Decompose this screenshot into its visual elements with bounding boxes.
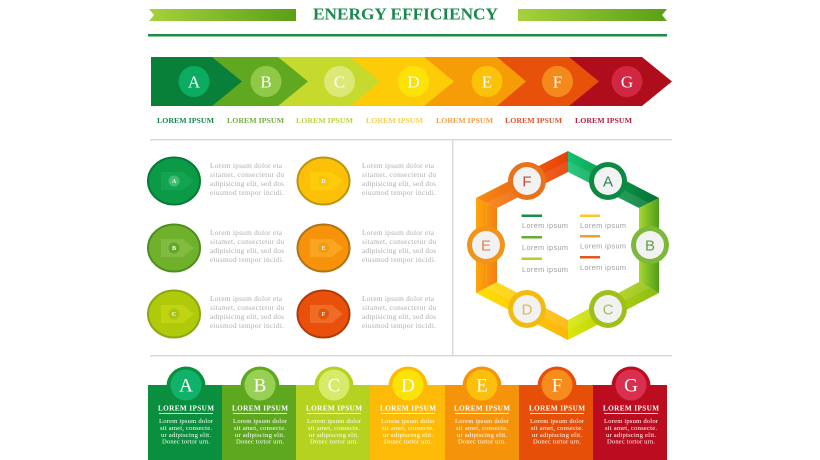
text A: sitamet, consectetur du xyxy=(210,170,284,179)
node A: A xyxy=(603,174,613,190)
ribbon: right xyxy=(518,9,667,21)
text E: sitamet, consectetur du xyxy=(362,237,436,246)
badge G: G xyxy=(621,72,633,92)
card G: sit amet, consecte. xyxy=(605,425,657,432)
text F: eiusmod tempor incidi. xyxy=(362,321,436,330)
card D: ur adipiscing elit. xyxy=(383,432,433,439)
badge E: E xyxy=(482,72,492,92)
bottom cards xyxy=(148,366,667,460)
card E: ur adipiscing elit. xyxy=(457,432,507,439)
card A: Lorem ipsum dolor xyxy=(159,418,214,425)
text B: eiusmod tempor incidi. xyxy=(210,255,284,264)
card A: LOREM IPSUM xyxy=(158,404,214,412)
text D xyxy=(362,161,436,197)
title: ENERGY EFFICIENCY xyxy=(313,4,498,24)
panel: rating circles xyxy=(148,158,436,338)
text A: eiusmod tempor incidi. xyxy=(210,188,284,197)
hexagon side A xyxy=(568,151,659,208)
hexagon diagram xyxy=(467,151,669,340)
card E: Donec tortor urn. xyxy=(458,438,506,446)
card G: LOREM IPSUM xyxy=(603,404,659,412)
node B: B xyxy=(645,238,655,254)
node A xyxy=(589,162,627,200)
card B: ur adipiscing elit. xyxy=(235,432,285,439)
card F: LOREM IPSUM xyxy=(529,404,585,412)
node B xyxy=(631,226,669,264)
card B: Donec tortor urn. xyxy=(236,438,284,446)
arrow labels: LOREM IPSUM xyxy=(436,116,493,125)
card F xyxy=(519,366,593,460)
arrow labels: LOREM IPSUM xyxy=(157,116,214,125)
card E: E xyxy=(476,376,488,396)
text A xyxy=(210,161,284,197)
badge E xyxy=(472,66,502,97)
text E: adipisicing elit, sed dos xyxy=(362,246,436,255)
text F: Lorem ipsum dolor eta xyxy=(362,294,435,303)
circle C: C xyxy=(172,312,176,318)
badge D xyxy=(398,66,429,97)
text C xyxy=(210,294,284,330)
legend: Lorem ipsum xyxy=(580,221,626,230)
hexagon side B xyxy=(639,198,659,293)
text C: sitamet, consectetur du xyxy=(210,303,284,312)
segment A xyxy=(151,57,242,106)
circle C xyxy=(148,290,200,338)
card F: Lorem ipsum dolor xyxy=(530,418,585,425)
card F: sit amet, consecte. xyxy=(531,425,583,432)
node E xyxy=(467,226,505,264)
text D: sitamet, consectetur du xyxy=(362,170,436,179)
badge A xyxy=(178,66,210,97)
text E: eiusmod tempor incidi. xyxy=(362,255,436,264)
card G xyxy=(593,366,667,460)
badge D: D xyxy=(407,72,420,92)
circle A: A xyxy=(172,179,177,185)
node C xyxy=(589,290,627,328)
node D: D xyxy=(522,302,533,318)
badge B: B xyxy=(260,72,272,92)
ribbon: left xyxy=(149,9,296,21)
badge C xyxy=(324,66,355,97)
node F xyxy=(508,162,546,200)
card B: B xyxy=(254,376,266,396)
arrow labels: LOREM IPSUM xyxy=(296,116,353,125)
card G: Donec tortor urn. xyxy=(607,438,655,446)
arrow labels: LOREM IPSUM xyxy=(505,116,562,125)
card A: sit amet, consecte. xyxy=(160,425,212,432)
header ribbons and title xyxy=(148,4,667,36)
card E: LOREM IPSUM xyxy=(454,404,510,412)
segment F xyxy=(490,57,599,106)
card B: sit amet, consecte. xyxy=(234,425,286,432)
node C: C xyxy=(603,302,614,318)
text E xyxy=(362,228,436,264)
text C: adipisicing elit, sed dos xyxy=(210,312,284,321)
card C: LOREM IPSUM xyxy=(306,404,362,412)
card D: LOREM IPSUM xyxy=(380,404,436,412)
card D xyxy=(370,366,445,460)
circle E xyxy=(298,224,350,272)
badge F xyxy=(542,66,573,97)
segment G xyxy=(560,57,672,106)
card C: C xyxy=(328,376,340,396)
text A: Lorem ipsum dolor eta xyxy=(210,161,283,170)
circle F xyxy=(298,290,350,338)
card C: Donec tortor urn. xyxy=(310,438,358,446)
badge B xyxy=(250,66,282,97)
text F: sitamet, consectetur du xyxy=(362,303,436,312)
node F: F xyxy=(522,174,532,190)
circle A xyxy=(148,158,200,204)
card B xyxy=(222,366,296,460)
arrow labels: LOREM IPSUM xyxy=(227,116,284,125)
card C xyxy=(296,366,370,460)
card E: Lorem ipsum dolor xyxy=(455,418,510,425)
text C: Lorem ipsum dolor eta xyxy=(210,294,283,303)
text D: eiusmod tempor incidi. xyxy=(362,188,436,197)
hexagon side F xyxy=(476,151,568,208)
card E: sit amet, consecte. xyxy=(456,425,508,432)
circle B: B xyxy=(172,246,176,252)
segment D xyxy=(345,57,454,106)
card D: Donec tortor urn. xyxy=(384,438,432,446)
text D: adipisicing elit, sed dos xyxy=(362,179,436,188)
circle D xyxy=(298,158,350,204)
circle F: F xyxy=(322,312,326,318)
segment E xyxy=(415,57,526,106)
card E xyxy=(445,366,519,460)
text B: Lorem ipsum dolor eta xyxy=(210,228,283,237)
text B: adipisicing elit, sed dos xyxy=(210,246,284,255)
legend: Lorem ipsum xyxy=(522,221,568,230)
hexagon side D xyxy=(476,282,568,340)
node E: E xyxy=(481,238,491,254)
legend: Lorem ipsum xyxy=(580,242,626,250)
hexagon side E xyxy=(476,198,497,293)
arrow labels xyxy=(157,116,632,125)
text A: adipisicing elit, sed dos xyxy=(210,179,284,188)
rating arrow A to G xyxy=(151,57,672,106)
card A xyxy=(148,366,222,460)
text F xyxy=(362,294,436,330)
badge G xyxy=(612,66,642,97)
legend: Lorem ipsum xyxy=(522,243,568,252)
card C: ur adipiscing elit. xyxy=(309,432,359,439)
card G: ur adipiscing elit. xyxy=(606,432,656,439)
card C: Lorem ipsum dolor xyxy=(307,418,362,425)
card D: sit amet, consecte. xyxy=(382,425,434,432)
text B xyxy=(210,228,284,264)
card F: F xyxy=(552,376,562,396)
card G: Lorem ipsum dolor xyxy=(604,418,659,425)
card F: Donec tortor urn. xyxy=(533,438,581,446)
legend: Lorem ipsum xyxy=(580,263,626,272)
card A: A xyxy=(179,376,193,396)
text B: sitamet, consectetur du xyxy=(210,237,284,246)
badge C: C xyxy=(334,72,345,92)
badge A: A xyxy=(188,72,201,92)
card C: sit amet, consecte. xyxy=(308,425,360,432)
badge F: F xyxy=(553,72,562,92)
segment C xyxy=(270,57,380,106)
text D: Lorem ipsum dolor eta xyxy=(362,161,435,170)
text E: Lorem ipsum dolor eta xyxy=(362,228,435,237)
card G: G xyxy=(624,376,638,396)
card B: Lorem ipsum dolor xyxy=(233,418,288,425)
hexagon side C xyxy=(568,282,659,340)
card B: LOREM IPSUM xyxy=(232,404,288,412)
segment B xyxy=(205,57,308,106)
arrow labels: LOREM IPSUM xyxy=(575,116,632,125)
circle E: E xyxy=(321,246,326,252)
card A: Donec tortor urn. xyxy=(162,438,210,446)
circle B xyxy=(148,224,200,272)
card F: ur adipiscing elit. xyxy=(532,432,582,439)
circle D: D xyxy=(321,179,326,185)
node D xyxy=(508,290,546,328)
arrow labels: LOREM IPSUM xyxy=(366,116,423,125)
card A: ur adipiscing elit. xyxy=(161,432,211,439)
card D: D xyxy=(401,376,415,396)
card D: Lorem ipsum dolor xyxy=(381,418,436,425)
text C: eiusmod tempor incidi. xyxy=(210,321,284,330)
legend: Lorem ipsum xyxy=(522,265,568,274)
text F: adipisicing elit, sed dos xyxy=(362,312,436,321)
legend xyxy=(522,214,626,274)
